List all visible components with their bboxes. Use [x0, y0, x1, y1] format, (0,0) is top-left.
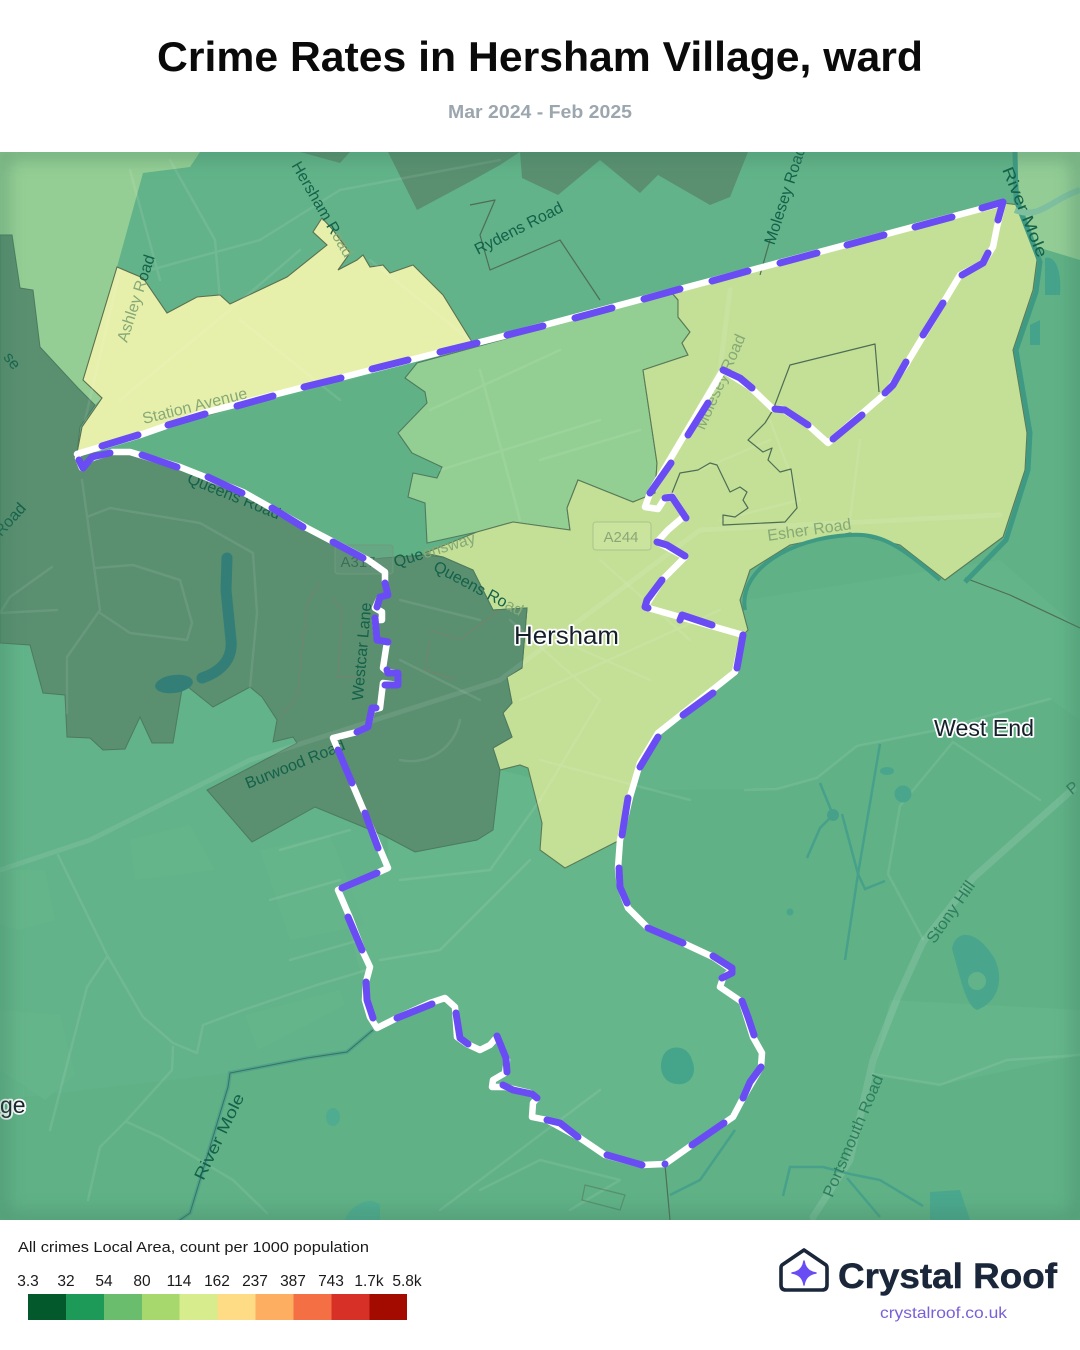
legend scale labels: 1.7k — [354, 1273, 384, 1290]
thin ward boundaries — [280, 200, 1080, 1220]
ward boundary: white line — [77, 203, 1003, 1165]
legend scale labels: 80 — [133, 1273, 151, 1290]
legend scale labels: 162 — [204, 1273, 230, 1290]
legend — [17, 1239, 422, 1320]
road shield: A317: A317 — [340, 554, 376, 571]
legend scale labels: 32 — [57, 1273, 75, 1290]
map panel — [0, 144, 1080, 1222]
street labels: Portsmouth Road — [820, 1073, 887, 1200]
street labels: Rydens Road — [472, 199, 566, 259]
legend scale labels: 743 — [318, 1273, 344, 1290]
street labels: se — [0, 349, 24, 373]
water: rivers and lakes — [154, 152, 1080, 1222]
street labels: Burwood Road — [243, 737, 348, 793]
street labels: Ashley Road — [115, 253, 159, 344]
region: lighter fields south-west — [0, 825, 1080, 1100]
legend scale labels: 5.8k — [392, 1273, 422, 1290]
street labels: Molesey Road — [762, 144, 810, 247]
ward boundary: purple dashes — [79, 202, 1003, 1165]
subtitle: date range: Mar 2024 - Feb 2025 — [448, 102, 632, 122]
region: light green north-east corner — [1015, 152, 1080, 260]
street labels: Westcar Lane — [350, 602, 375, 701]
street labels — [0, 144, 1080, 1200]
legend scale labels: 387 — [280, 1273, 306, 1290]
map edge vignette — [0, 152, 1080, 1220]
place labels: West End — [934, 715, 1034, 741]
street labels: Queens Road — [431, 558, 526, 620]
region: medium-light central — [398, 293, 690, 543]
street labels: River Mole — [192, 1091, 248, 1183]
road network — [0, 160, 1080, 1217]
legend scale labels: 3.3 — [17, 1273, 39, 1290]
road shield: A317 — [335, 545, 393, 574]
legend scale labels: 54 — [95, 1273, 113, 1290]
legend scale labels: 237 — [242, 1273, 268, 1290]
legend scale labels: 114 — [167, 1273, 192, 1290]
region: upper medium green area — [0, 152, 1015, 1100]
logo: Crystal Roof — [781, 1250, 1057, 1322]
road shield: A244 — [593, 522, 651, 550]
region: eastern lighter area — [640, 560, 1080, 790]
place labels: ge — [0, 1092, 26, 1118]
region: light green north-west — [0, 152, 200, 405]
place labels: Hersham — [514, 622, 619, 650]
region: dark patches at top — [300, 152, 748, 210]
street labels: Stony Hill — [924, 878, 979, 947]
region: Hersham yellow-green — [425, 203, 1037, 868]
road shield: A244: A244 — [603, 529, 639, 546]
legend colour bar — [28, 1294, 407, 1320]
lake — [661, 1047, 694, 1084]
street labels: Queens Road — [185, 470, 283, 523]
region: Station Avenue yellow — [77, 218, 472, 453]
icon: house with star — [781, 1250, 827, 1290]
street labels: River Mole — [998, 165, 1050, 260]
lake: dark west — [154, 558, 231, 696]
legend title: All crimes Local Area, count per 1000 population — [18, 1239, 369, 1256]
street labels: Esher Road — [766, 516, 852, 545]
title: Crime Rates in Hersham Village, ward — [157, 33, 923, 80]
region: southern ward area — [338, 572, 762, 1165]
legend scale labels — [17, 1273, 422, 1290]
street labels: Queensway — [392, 530, 478, 571]
River Mole south-west — [177, 1030, 373, 1222]
street labels: Hersham Road — [288, 159, 356, 261]
logo url: crystalroof.co.uk — [880, 1305, 1008, 1322]
place labels — [0, 622, 1034, 1118]
region: dark west — [0, 235, 527, 852]
street labels: Molesey Road — [692, 332, 749, 432]
street labels: → — [255, 384, 275, 405]
logo wordmark: Crystal Roof — [838, 1257, 1057, 1296]
street labels: Station Avenue — [141, 385, 249, 428]
